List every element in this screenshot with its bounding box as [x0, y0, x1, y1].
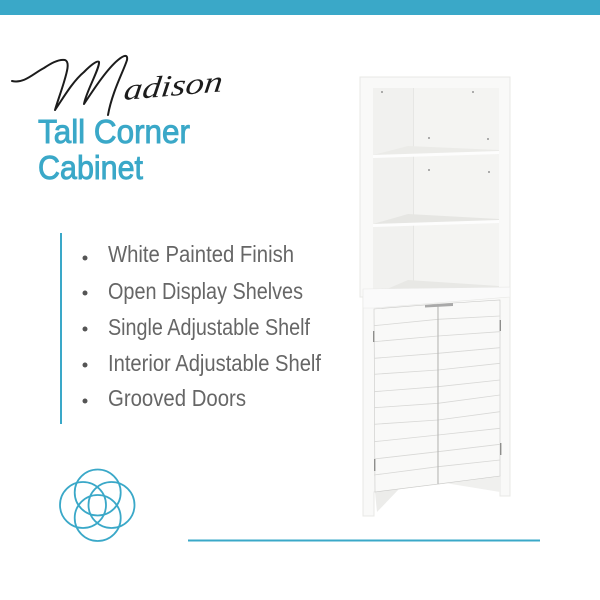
shelves [373, 146, 499, 295]
list item 1: White Painted Finish [108, 241, 294, 267]
brand swash [12, 56, 127, 115]
brand name text: adison [122, 64, 225, 107]
logo: overlapping circles [60, 470, 134, 541]
hinges [373, 320, 501, 471]
brand script: Madison [12, 56, 225, 115]
bottom rule [188, 540, 540, 542]
back corner [373, 88, 413, 296]
counter band [363, 287, 510, 308]
cabinet doors [374, 300, 500, 492]
under-door base shadows [375, 489, 399, 512]
top banner bar [0, 0, 600, 15]
feature list [82, 241, 322, 411]
cabinet illustration [360, 77, 510, 516]
list item 2: Open Display Shelves [108, 278, 303, 304]
title [38, 113, 190, 186]
list item 4: Interior Adjustable Shelf [108, 350, 322, 376]
vertical accent line [60, 233, 62, 424]
door center seam [437, 304, 439, 484]
cabinet frame [360, 77, 510, 516]
door grooves [374, 316, 500, 475]
title line 2: Cabinet [38, 149, 143, 186]
shelf pin holes [381, 91, 490, 173]
list item 5: Grooved Doors [108, 385, 246, 411]
title line 1: Tall Corner [38, 113, 190, 150]
door handle [425, 303, 453, 308]
open shelf interior [373, 88, 499, 296]
list item 3: Single Adjustable Shelf [108, 314, 311, 340]
